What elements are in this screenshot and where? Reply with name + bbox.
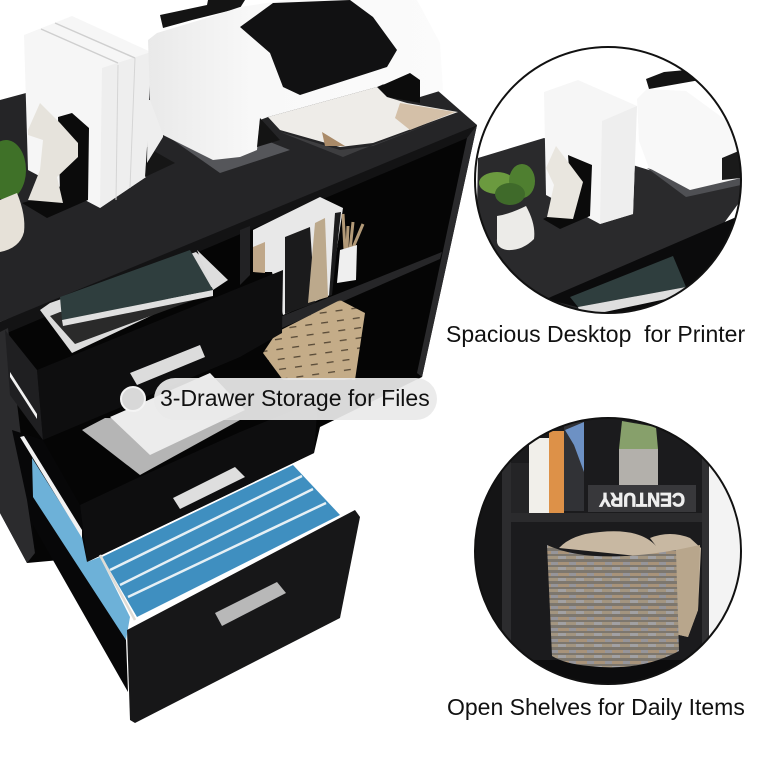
handle <box>130 345 205 385</box>
books <box>511 463 529 513</box>
potted plant <box>619 421 658 449</box>
cabinet top surface <box>0 60 477 322</box>
front bookend <box>22 113 89 218</box>
vase <box>497 206 534 250</box>
paper slot <box>257 118 280 147</box>
printer body <box>650 168 740 190</box>
printer body <box>148 0 443 160</box>
printer base <box>163 125 290 173</box>
printer top bar <box>646 70 700 89</box>
vertical divider <box>240 226 250 285</box>
handle <box>173 467 245 509</box>
basket <box>547 545 679 667</box>
bookend <box>543 155 592 229</box>
inner dark backing <box>12 430 128 692</box>
top front edge <box>0 125 477 336</box>
cup of pens <box>337 214 363 283</box>
panel: desktop detail circle <box>475 47 741 313</box>
CENTURY book <box>588 485 696 512</box>
white stripe <box>20 436 82 538</box>
plant <box>479 164 535 205</box>
furniture: black cabinet with printer and drawers <box>0 0 477 723</box>
printer window <box>240 0 397 95</box>
middle drawer <box>80 373 318 562</box>
callout: 3-drawer storage pill <box>121 378 437 420</box>
shelf cabinet <box>511 419 702 660</box>
teal notebook <box>60 250 213 320</box>
cabinet body <box>0 125 477 563</box>
dark desktop <box>475 138 741 300</box>
white horse figurine <box>28 103 78 203</box>
books <box>544 80 637 224</box>
panel: open shelf detail circle <box>475 418 741 684</box>
output tray <box>280 113 458 157</box>
right page <box>197 250 228 290</box>
top drawer <box>5 250 283 440</box>
printed paper <box>268 87 458 147</box>
shelf board <box>280 252 442 328</box>
printer top bar <box>160 0 245 28</box>
front panel <box>127 510 360 723</box>
drawer contents: lower binder <box>40 252 227 353</box>
books on shelf <box>253 197 343 315</box>
bookend books on desktop <box>24 16 151 208</box>
right side panel <box>417 125 477 377</box>
front panel <box>80 400 318 562</box>
printer base <box>647 168 740 197</box>
potted plant <box>0 140 26 252</box>
caption: desktop: Spacious Desktop for Printer <box>446 321 745 347</box>
bottom drawer with files <box>12 430 360 723</box>
icon: round highlight <box>121 387 145 411</box>
handle <box>215 582 286 626</box>
horse <box>546 146 583 219</box>
side wall <box>5 330 43 440</box>
white stripe <box>10 372 37 419</box>
caption: open shelves: Open Shelves for Daily Items <box>447 694 745 720</box>
printer <box>148 0 458 173</box>
blue left wall <box>32 458 130 640</box>
blanket <box>559 531 701 637</box>
CENTURY book: CENTURY <box>599 488 685 509</box>
callout: 3-drawer storage pill: 3-Drawer Storage for Files <box>160 385 430 411</box>
left side panel <box>0 328 35 563</box>
teal notebook <box>570 256 686 307</box>
basket on lower shelf <box>263 300 365 380</box>
rear horse and bookend <box>145 100 175 177</box>
front panel <box>37 270 283 440</box>
